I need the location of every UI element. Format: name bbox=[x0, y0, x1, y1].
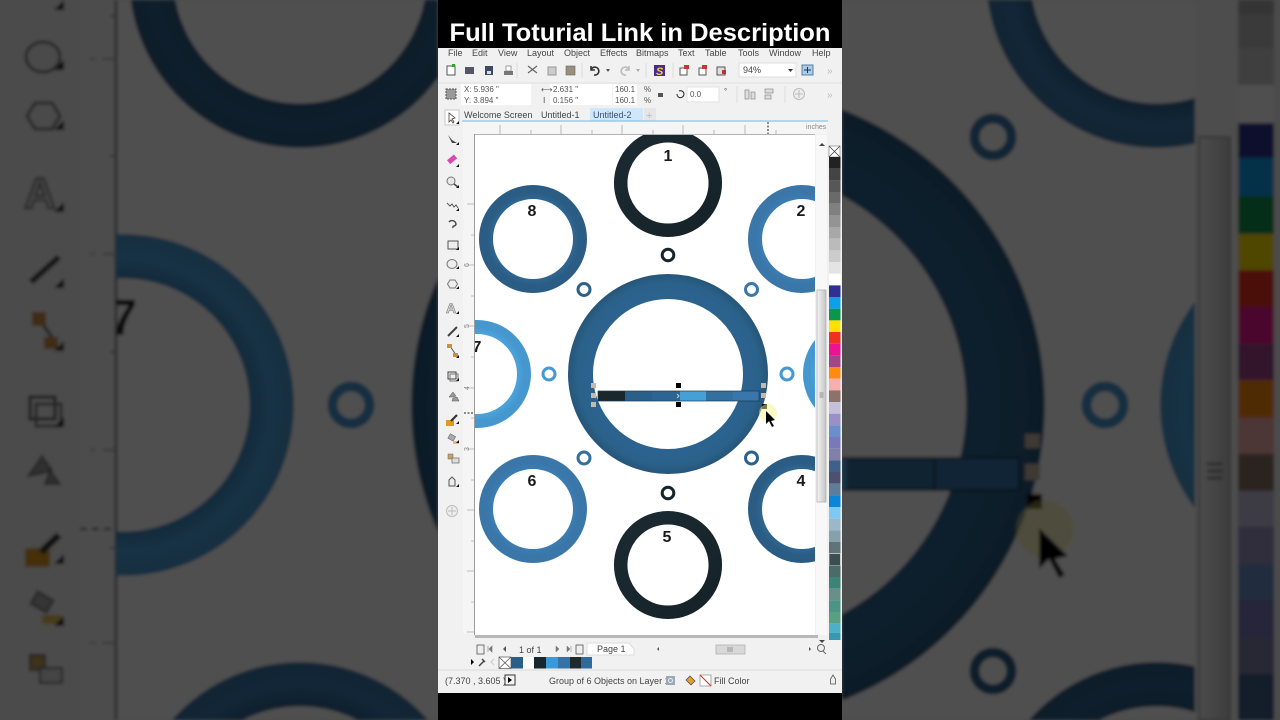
mouse cursor with highlight bbox=[759, 404, 777, 427]
vertical ruler bbox=[463, 134, 815, 635]
left blurred background panel: 4 bbox=[90, 448, 97, 452]
zoom level dropdown bbox=[739, 63, 833, 77]
menu bar: Effects bbox=[600, 48, 628, 58]
property bar bbox=[446, 84, 833, 105]
menu bar: Tools bbox=[738, 48, 760, 58]
large centre ring bbox=[580, 286, 756, 462]
standard toolbar icons: S bbox=[656, 66, 664, 78]
ring 5 bbox=[621, 518, 715, 612]
ring 8 bbox=[486, 192, 580, 286]
document tabs: Untitled-2 bbox=[593, 110, 632, 120]
menu bar: Help bbox=[812, 48, 831, 58]
document tabs bbox=[462, 108, 828, 122]
property bar: 160.1 bbox=[615, 85, 636, 94]
property bar: Ⅰ bbox=[543, 96, 545, 105]
ring 2 bbox=[748, 185, 815, 293]
vertical ruler: 5 bbox=[464, 324, 471, 328]
left blurred background panel: 6 bbox=[90, 57, 97, 61]
menu bar: Table bbox=[705, 48, 727, 58]
status bar: (7.370 , 3.605 ) bbox=[445, 676, 506, 686]
ring 5: 5 bbox=[663, 529, 672, 546]
menu bar: Bitmaps bbox=[636, 48, 669, 58]
vertical scrollbar bbox=[816, 135, 827, 643]
ring 7 bbox=[475, 320, 531, 428]
application window bbox=[438, 48, 842, 693]
property bar: X: 5.936 " bbox=[464, 85, 499, 94]
horizontal canvas edge and page navigator bbox=[475, 635, 818, 655]
menu bar: Window bbox=[769, 48, 802, 58]
property bar: 2.631 " bbox=[553, 85, 578, 94]
colour palette bbox=[829, 146, 840, 640]
menu bar bbox=[448, 48, 831, 58]
ring 2: 2 bbox=[797, 203, 806, 220]
zoom level dropdown: » bbox=[827, 66, 833, 77]
standard toolbar icons bbox=[447, 63, 726, 78]
vertical ruler: 3 bbox=[464, 447, 471, 451]
ring 6: 6 bbox=[528, 473, 537, 490]
horizontal ruler: inches bbox=[806, 124, 827, 131]
horizontal scrollbar bbox=[657, 644, 826, 654]
document tabs: Welcome Screen bbox=[464, 110, 532, 120]
black video letterbox column bbox=[438, 0, 842, 720]
left blurred background panel: 3 bbox=[90, 641, 97, 645]
drawing canvas bbox=[475, 135, 815, 635]
horizontal ruler bbox=[463, 122, 827, 134]
horizontal canvas edge and page navigator: Page 1 bbox=[597, 644, 626, 654]
property bar: 0.156 " bbox=[553, 96, 578, 105]
ring 1: 1 bbox=[664, 148, 673, 165]
left blurred background panel: 5 bbox=[90, 252, 97, 256]
right blurred background panel bbox=[842, 0, 1280, 720]
small connector rings bbox=[543, 249, 793, 499]
ring 8: 8 bbox=[528, 203, 537, 220]
property bar: 0.0 bbox=[690, 90, 702, 99]
menu bar: Object bbox=[564, 48, 591, 58]
ring 3 bbox=[803, 340, 815, 408]
ring 6 bbox=[486, 462, 580, 556]
document tabs: + bbox=[646, 110, 652, 122]
status bar: Group of 6 Objects on Layer 1 bbox=[549, 676, 670, 686]
left blurred background panel: 7 bbox=[109, 289, 137, 346]
vertical ruler: 6 bbox=[464, 263, 471, 267]
menu bar: Edit bbox=[472, 48, 488, 58]
menu bar: Layout bbox=[527, 48, 555, 58]
horizontal canvas edge and page navigator: 1 of 1 bbox=[519, 645, 542, 655]
property bar: 160.1 bbox=[615, 96, 636, 105]
title banner: Full Toturial Link in Description bbox=[450, 19, 830, 47]
ring 7: 7 bbox=[473, 339, 482, 356]
zoom level dropdown: 94% bbox=[743, 65, 761, 75]
segmented colour bar selection bbox=[591, 383, 767, 409]
property bar: ° bbox=[724, 87, 727, 96]
document palette swatches bbox=[471, 657, 592, 668]
menu bar: Text bbox=[678, 48, 695, 58]
menu bar: View bbox=[498, 48, 518, 58]
document tabs: Untitled-1 bbox=[541, 110, 580, 120]
vertical ruler: 4 bbox=[464, 386, 471, 390]
property bar: » bbox=[827, 90, 833, 101]
left toolbox: A bbox=[446, 300, 456, 316]
property bar: % bbox=[644, 96, 651, 105]
property bar: ⟷ bbox=[541, 85, 553, 94]
left blurred background panel bbox=[0, 0, 438, 720]
bottom letterbox bbox=[438, 693, 842, 720]
status bar: Fill Color bbox=[714, 676, 750, 686]
property bar: Y: 3.894 " bbox=[464, 96, 499, 105]
menu bar: File bbox=[448, 48, 463, 58]
left blurred background panel: A bbox=[24, 169, 56, 218]
infographic rings on canvas bbox=[475, 135, 815, 619]
ring 1 bbox=[621, 136, 715, 230]
status bar bbox=[445, 675, 836, 686]
property bar: % bbox=[644, 85, 651, 94]
ring 4: 4 bbox=[797, 473, 806, 490]
ring 4 bbox=[748, 455, 815, 563]
left toolbox bbox=[445, 110, 459, 516]
